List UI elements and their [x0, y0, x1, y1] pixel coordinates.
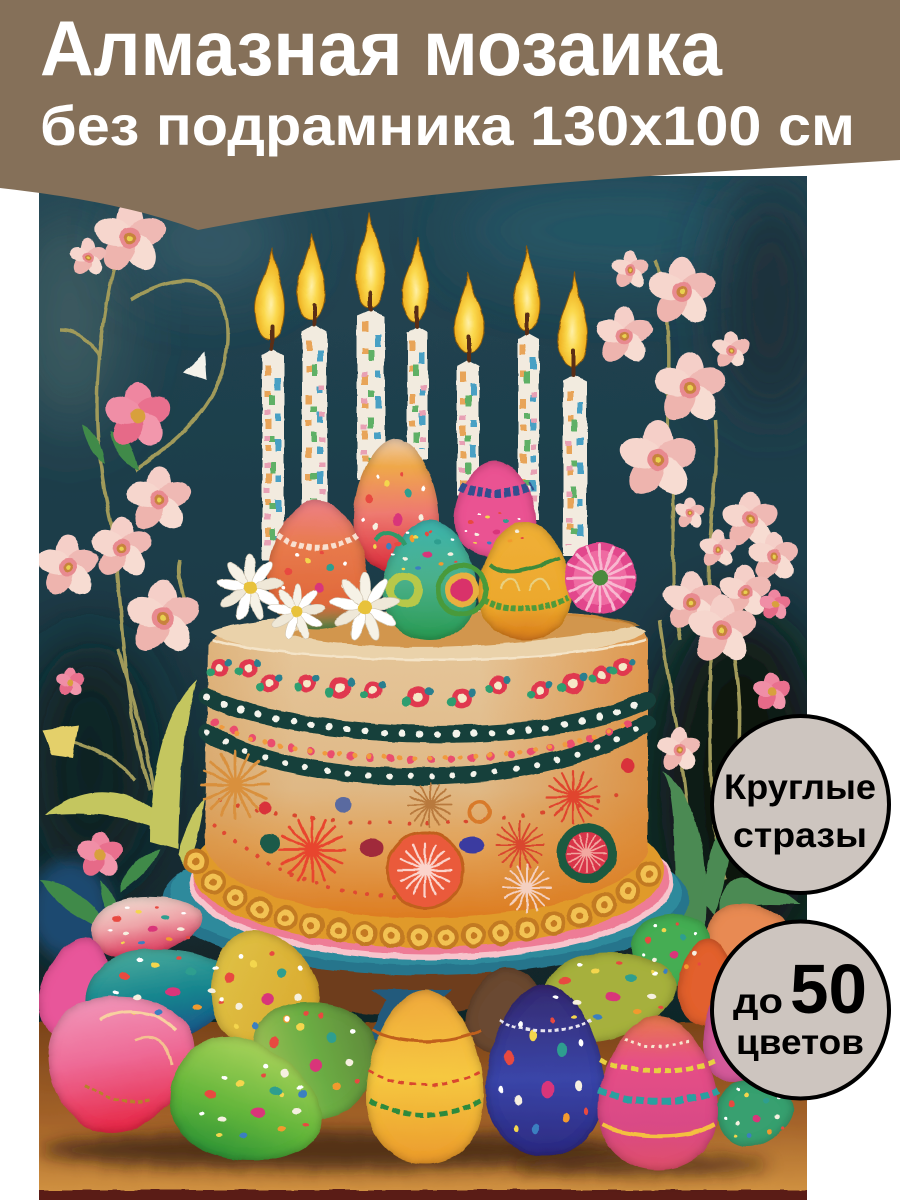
badge: round rhinestones: стразы [733, 816, 867, 855]
cake stand [162, 857, 690, 1040]
badge: round rhinestones [712, 716, 889, 893]
cake medallions [201, 751, 635, 912]
bottom egg decoration [85, 906, 784, 1138]
badge: up to 50 colours [712, 922, 889, 1098]
bottom eggs [30, 887, 798, 1186]
panel: painting [20, 170, 820, 1200]
candle wicks [272, 292, 574, 375]
badge: up to 50 colours: 50 [790, 950, 867, 1028]
candles [255, 213, 587, 560]
top eggs on cake [216, 439, 636, 642]
badge: up to 50 colours: до [733, 982, 783, 1021]
title: Алмазная мозаика [40, 4, 723, 92]
subtitle: без подрамника 130х100 см [40, 94, 855, 157]
badge: up to 50 colours: цветов [736, 1023, 864, 1062]
banner [0, 0, 900, 230]
top flowers [216, 542, 636, 642]
candle flames [255, 213, 587, 367]
badge: round rhinestones: Круглые [724, 768, 876, 807]
pink flower [564, 542, 636, 614]
cake [192, 610, 664, 947]
left floral branch [34, 201, 228, 935]
cake beads row [207, 658, 636, 708]
cake piping rosettes [196, 861, 660, 937]
cake top surface [210, 616, 646, 659]
painting artwork [20, 170, 820, 1200]
right floral branch [593, 251, 801, 925]
table [30, 1022, 820, 1200]
cake bands [207, 697, 647, 900]
top egg decoration [278, 486, 568, 614]
painting background [39, 176, 807, 1022]
